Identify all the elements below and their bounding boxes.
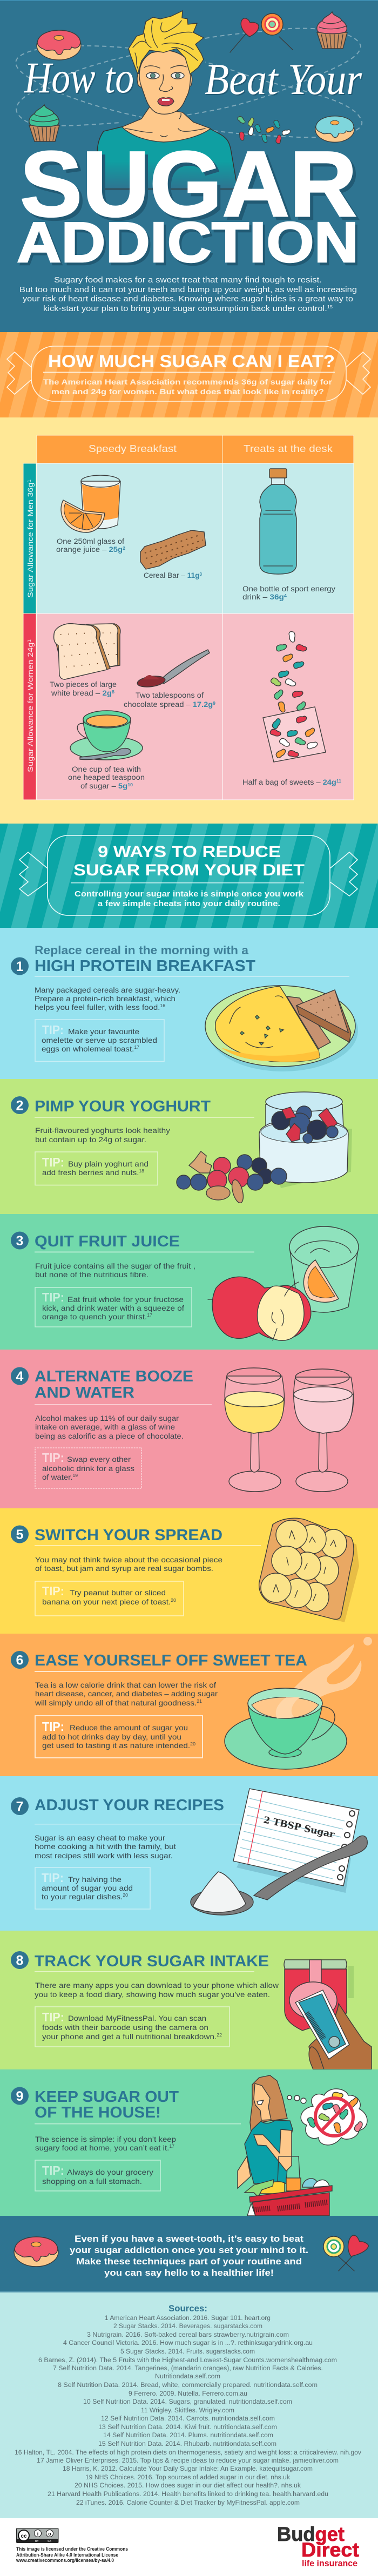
sources list [15, 2315, 361, 2506]
tip box: amount of sugar you add [42, 1884, 133, 1892]
table header: treats at the desk: Treats at the desk [244, 443, 333, 454]
tip box: 22 [217, 2033, 222, 2038]
text: cereal bar: 3 [199, 572, 202, 577]
table header: speedy breakfast [37, 435, 222, 463]
sources list: 14 Self Nutrition Data. 2014. Plums. nutritiondata.self.com [103, 2432, 273, 2439]
sources list: 15 Self Nutrition Data. 2014. Rhubarb. nutritiondata.self.com [98, 2441, 276, 2447]
panel: tip 9 keep sugar out of the house [0, 2069, 378, 2216]
number 5: 5 [16, 1527, 24, 1542]
number 5 [11, 1525, 29, 1543]
text: chocolate spread: chocolate spread – 17.2g [124, 700, 211, 709]
text: tea: One cup of tea with [72, 765, 141, 773]
tip box: Always do your grocery [67, 2168, 153, 2176]
illustration: berry pile [177, 1151, 287, 1204]
illustration: shocked woman [95, 11, 238, 189]
icon: white bread [54, 624, 120, 679]
body text [35, 1681, 218, 1707]
tip box [35, 1716, 202, 1758]
icon: lollipops [323, 2235, 368, 2271]
body text [35, 1414, 184, 1440]
body text: Fruit juice contains all the sugar of the fruit , [35, 1262, 195, 1270]
creative commons badge: cc [21, 2533, 27, 2539]
heading: Replace cereal in the morning with a [35, 943, 249, 957]
body text: Fruit-flavoured yoghurts look healthy [35, 1126, 170, 1135]
sources list: Nutritiondata.self.com [155, 2373, 220, 2380]
tip box: Swap every other [67, 1455, 131, 1464]
number 1: 1 [16, 959, 24, 974]
icon: sports drink bottle [260, 469, 296, 574]
sources list: 16 Halton, TL. 2004. The effects of high protein diets on thermogenesis, satiety and weight loss: a criticalreview. nih.gov [15, 2450, 361, 2456]
text: orange juice: 2 [123, 546, 126, 551]
number 8 [11, 1951, 29, 1969]
sources list: 18 Harris, K. 2012. Calculate Your Daily Sugar Intake: An Example. katequitsugar.com [63, 2466, 313, 2472]
dashed sugar orbit lines [16, 28, 362, 137]
tip box: shopping on a full stomach. [42, 2177, 142, 2186]
tip box: Make your favourite [68, 1027, 139, 1036]
number 7: 7 [16, 1799, 23, 1815]
panel: tip 1 high protein breakfast [0, 928, 378, 1079]
panel: sugar allowance table [0, 417, 378, 824]
panel: how much sugar banner [0, 332, 378, 417]
number 6 [11, 1651, 29, 1669]
tip box: TIP: [42, 1155, 64, 1169]
candy wrapper outline [7, 346, 370, 401]
banner text [43, 377, 333, 396]
heading: EASE YOURSELF OFF SWEET TEA [35, 1652, 307, 1669]
tip box: 20 [190, 1742, 196, 1746]
heading: HOW MUCH SUGAR CAN I EAT? [48, 352, 335, 371]
cell: men treats [222, 463, 354, 613]
icon: pink cupcake [317, 12, 347, 49]
table header: treats at the desk [222, 435, 354, 463]
panel: sources [0, 2292, 378, 2518]
illustration: banana toast [259, 1518, 359, 1622]
illustration: omelette and toast [205, 986, 358, 1071]
number 6: 6 [16, 1653, 23, 1668]
text: chocolate spread: Two tablespoons of [136, 691, 204, 699]
intro text: Sugary food makes for a sweet treat that many find tough to resist. [54, 276, 322, 285]
heading: SWITCH YOUR SPREAD [35, 1527, 222, 1544]
tip box [35, 2160, 160, 2191]
body text: The science is simple: if you don’t keep [35, 2135, 176, 2143]
body text: but contain up to 24g of sugar. [35, 1135, 146, 1144]
heading: PIMP YOUR YOGHURT [35, 1098, 211, 1115]
tip box: 19 [72, 1473, 78, 1478]
sources heading: Sources: [168, 2303, 207, 2314]
licence text: This image is licensed under the Creative Commons [16, 2546, 128, 2552]
tip box: Download MyFitnessPal. You can scan [68, 2014, 206, 2022]
text: cereal bar: Cereal Bar – 11g [144, 571, 199, 579]
banner text: men and 24g for women. But what does that look like in reality? [51, 387, 324, 396]
body text: 21 [197, 1699, 202, 1704]
licence text [16, 2546, 128, 2564]
tip box: banana on your next piece of toast. [42, 1597, 160, 1606]
body text: You may not think twice about the occasional piece [35, 1555, 222, 1564]
tip box: TIP: [42, 2010, 64, 2024]
body text: of toast, but jam and syrup are real sugar bombs. [35, 1564, 213, 1573]
illustration: apple [208, 1277, 311, 1340]
text: orange juice [56, 537, 126, 554]
body text: Prepare a protein-rich breakfast, which [35, 994, 176, 1003]
icon: steam droplet [363, 1637, 372, 1646]
tip box: 20 [171, 1598, 177, 1603]
sources list: 5 Sugar Stacks. 2014. Fruits. sugarstacks.com [120, 2349, 255, 2355]
body text: There are many apps you can download to your phone which allow [35, 1981, 279, 1990]
text: bread: 8 [112, 690, 115, 694]
tip box: Eat fruit whole for your fructose [68, 1295, 184, 1304]
licence text: www.creativecommons.org/licenses/by-sa/4.0 [16, 2558, 114, 2564]
tip box: add fresh berries and nuts. [42, 1168, 132, 1177]
sources list: 20 NHS Choices. 2015. How does sugar in our diet affect our health?. nhs.uk [75, 2483, 301, 2489]
body text: 17 [169, 2144, 175, 2149]
tip box: Buy plain yoghurt and [68, 1159, 148, 1168]
text: orange juice: One 250ml glass of [57, 537, 124, 545]
tip box: 17 [134, 1045, 140, 1050]
icon: heart lollipop [230, 18, 259, 52]
cell: women treats [222, 613, 354, 800]
heading: TRACK YOUR SUGAR INTAKE [35, 1953, 269, 1970]
text: sweets: 11 [336, 779, 342, 784]
sources list: 9 Ferrero. 2009. Nutella. Ferrero.com.au [129, 2391, 247, 2397]
tip box: Try peanut butter or sliced [70, 1588, 166, 1597]
body text: most recipes still work with less sugar. [35, 1851, 173, 1860]
logo: Budget Direct life insurance [277, 2523, 359, 2568]
tip box: 20 [123, 1893, 129, 1898]
number 4: 4 [16, 1369, 24, 1384]
tip box: TIP: [42, 1871, 64, 1885]
body text: Sugar is an easy cheat to make your [35, 1833, 165, 1842]
tip box [35, 1581, 184, 1616]
tip box: your phone and get a full nutritional breakdown. [42, 2032, 201, 2041]
closing text: you can say hello to a healthier life! [104, 2268, 274, 2278]
body text: helps you feel fuller, with less food. [35, 1003, 151, 1011]
panel: closing message [0, 2216, 378, 2292]
panel: tip 6 ease yourself off sweet tea [0, 1634, 378, 1776]
illustration: tea steam [276, 1644, 361, 1720]
intro text [19, 276, 357, 313]
illustration: yoghurt jar with berries [259, 1092, 352, 1188]
sources list: 3 Nutrigrain. 2016. Soft-baked cereal bars strawberry.nutrigrain.com [87, 2332, 289, 2338]
body text: Tea is a low calorie drink that can lower the risk of [35, 1681, 216, 1689]
banner text: a few simple cheats into your daily routine. [98, 899, 280, 908]
illustration: woman with shopping basket [238, 2075, 332, 2216]
tip box: TIP: [42, 1451, 64, 1465]
tip box: get used to tasting it as nature intended. [42, 1741, 177, 1750]
text: tea [68, 765, 145, 790]
tip box: Reduce the amount of sugar you [70, 1723, 188, 1732]
tip box: 18 [139, 1169, 145, 1174]
illustration: glass of white wine [225, 1368, 285, 1492]
banner text [75, 889, 304, 908]
closing text: your sugar addiction once you set your mind to it. [70, 2245, 308, 2255]
tip box: eggs on wholemeal toast. [42, 1044, 127, 1053]
sources list: 6 Barnes, Z. (2014). The 5 Fruits with the Highest-and Lowest-Sugar Counts.womenshealthmag.com [38, 2357, 337, 2364]
body text [35, 1833, 176, 1860]
title: How to Beat Your: How to [24, 53, 134, 102]
table header: speedy breakfast: Speedy Breakfast [89, 443, 177, 454]
tip box: orange to quench your thirst. [42, 1312, 138, 1321]
sources list: 12 Self Nutrition Data. 2014. Carrots. nutritiondata.self.com [101, 2416, 275, 2422]
heading: SUGAR FROM YOUR DIET [73, 861, 305, 879]
illustration: spoon of sugar [191, 1836, 367, 1915]
title: SUGAR: SUGAR [20, 132, 357, 236]
icon: chocolate spoon [137, 650, 210, 689]
heading: ALTERNATE BOOZE [35, 1368, 193, 1385]
row label: men: Sugar Allowance for Men 36g [26, 503, 35, 598]
number 9 [11, 2087, 29, 2105]
tip box: foods with their barcode using the camera on [42, 2023, 208, 2032]
icon: bag of sweets [263, 631, 326, 762]
body text [35, 1981, 279, 1999]
illustration: glass of rose wine [294, 1369, 354, 1492]
icon: donut [14, 2237, 58, 2267]
text: sports drink: drink – 36g [242, 593, 282, 601]
tip box: TIP: [42, 1290, 64, 1304]
icon: spiral lollipop [261, 14, 293, 50]
intro text: kick-start your plan to bring your sugar consumption back under control. [43, 305, 292, 313]
logo: Budget Direct life insurance: Budget [277, 2523, 345, 2545]
tip box: TIP: [42, 1719, 64, 1734]
number 1 [11, 957, 29, 975]
tip box: TIP: [42, 1584, 64, 1598]
illustration: glass of water with orange [289, 1226, 359, 1312]
icon: green cupcake [29, 105, 59, 141]
number 8: 8 [16, 1953, 24, 1968]
icon: jelly beans [237, 116, 291, 144]
creative commons badge: BY [35, 2540, 39, 2543]
sources list: 21 Harvard Health Publications. 2014. Health benefits linked to drinking tea. health.harvard.edu [48, 2491, 328, 2498]
body text: Alcohol makes up 11% of our daily sugar [35, 1414, 179, 1422]
panel: footer [0, 2518, 378, 2576]
tip box: Try halving the [68, 1875, 122, 1884]
tip box [35, 1448, 141, 1488]
panel: tip 7 adjust your recipes [0, 1776, 378, 1931]
licence text: Attribution-Share Alike 4.0 International License [16, 2552, 118, 2558]
sources list: 19 NHS Choices. 2016. Top sources of added sugar in our diet. nhs.uk [85, 2474, 290, 2481]
icon: blue donut [315, 116, 354, 142]
row label: men [23, 463, 36, 613]
tip box [35, 1020, 164, 1062]
body text: you to keep a food diary, showing how much sugar you’ve eaten. [35, 1990, 270, 1999]
heading [35, 2088, 179, 2121]
row label: women [23, 613, 36, 800]
heading [73, 843, 305, 879]
panel: tip 5 switch your spread [0, 1508, 378, 1634]
text: sports drink: 4 [284, 594, 287, 598]
tip box: add to hot drinks day by day, until you [42, 1732, 181, 1741]
banner text: Controlling your sugar intake is simple once you work [75, 889, 304, 899]
text: tea: one heaped teaspoon [68, 773, 145, 781]
panel: tip 2 pimp your yoghurt [0, 1079, 378, 1214]
icon: cup of tea [70, 711, 143, 760]
closing text: Even if you have a sweet-tooth, it’s easy to beat [75, 2234, 303, 2244]
creative commons badge: i [37, 2531, 38, 2537]
text: orange juice: orange juice – 25g [56, 545, 122, 554]
body text: Many packaged cereals are sugar-heavy. [35, 986, 180, 994]
illustration: recipe note [233, 1789, 359, 1893]
intro text: 15 [327, 305, 333, 309]
sources list: 22 iTunes. 2016. Calorie Counter & Diet Tracker by MyFitnessPal. apple.com [76, 2500, 300, 2506]
illustration: cup of tea on saucer [225, 1688, 347, 1769]
tip box: to your regular dishes. [42, 1892, 117, 1901]
tip box [35, 1867, 150, 1909]
banner text: The American Heart Association recommends 36g of sugar daily for [43, 377, 333, 386]
sources list: 10 Self Nutrition Data. 2014. Sugars, granulated. nutritiondata.self.com [83, 2399, 292, 2405]
text: chocolate spread: 9 [213, 701, 216, 706]
body text: sugary food at home, you can’t eat it. [35, 2143, 159, 2152]
candy wrapper outline [19, 835, 357, 915]
tip box: kick, and drink water with a squeeze of [42, 1304, 184, 1312]
closing text [70, 2234, 308, 2278]
heading [35, 1368, 193, 1401]
panel: tip 4 alternate booze and water [0, 1350, 378, 1508]
number 7 [11, 1797, 29, 1815]
text: tea: of sugar – 5g [80, 782, 127, 790]
body text [35, 986, 180, 1011]
sources list: 4 Cancer Council Victoria. 2016. How much sugar is in ...?. rethinksugarydrink.org.au [63, 2340, 313, 2346]
illustration: recipe note: 2 TBSP Sugar [262, 1815, 336, 1840]
title: ADDICTION: ADDICTION [17, 211, 359, 274]
body text [35, 1262, 195, 1279]
tip box [35, 2007, 230, 2047]
thought bubble: no sweets [287, 2089, 367, 2145]
panel: 9 ways banner [0, 824, 378, 928]
body text: being as calorific as a piece of chocolate. [35, 1432, 184, 1440]
body text [35, 2135, 176, 2152]
tip box: alcoholic drink for a glass [42, 1464, 134, 1473]
tip box: omelette or serve up scrambled [42, 1036, 157, 1044]
row label: women: Sugar Allowance for Women 24g [26, 666, 35, 772]
row label: men: 1 [27, 479, 32, 482]
icon: cereal bar [140, 530, 206, 569]
logo: Budget Direct life insurance: Direct [301, 2539, 359, 2561]
body text [35, 1126, 170, 1144]
panel: header [0, 0, 378, 332]
text: bread: white bread – 2g [51, 689, 111, 697]
panel: tip 8 track your sugar intake [0, 1931, 378, 2069]
sources list: 8 Self Nutrition Data. 2014. Bread, white, commercially prepared. nutritiondata.self.com [58, 2382, 318, 2389]
sources list: 11 Wrigley. Skittles. Wrigley.com [141, 2408, 234, 2414]
number 4 [11, 1367, 29, 1385]
body text: heart disease, cancer, and diabetes – adding sugar [35, 1689, 218, 1698]
heading: HIGH PROTEIN BREAKFAST [35, 957, 255, 975]
tip box: TIP: [42, 1023, 64, 1037]
tip box: TIP: [42, 2163, 64, 2177]
cell: women breakfast [37, 613, 222, 800]
text: sports drink: One bottle of sport energy [242, 585, 335, 593]
heading: 9 WAYS TO REDUCE [98, 843, 281, 861]
sources list: 7 Self Nutrition Data. 2014. Tangerines, (mandarin oranges), raw Nutrition Facts & Calories. [53, 2365, 323, 2372]
tip box: 17 [147, 1313, 153, 1318]
creative commons badge [16, 2528, 58, 2543]
text: sweets: Half a bag of sweets – 24g [242, 778, 335, 786]
creative commons badge: o [48, 2531, 51, 2537]
row label: women: 1 [27, 639, 32, 642]
text: sports drink [242, 585, 335, 601]
intro text: your risk of heart disease and diabetes. Knowing where sugar hides is a great way to [23, 295, 353, 304]
sources list: 13 Self Nutrition Data. 2014. Kiwi fruit. nutritiondata.self.com [98, 2424, 277, 2431]
text: bread [50, 680, 117, 697]
body text: 16 [160, 1003, 166, 1008]
number 9: 9 [16, 2089, 23, 2104]
heading: OF THE HOUSE! [35, 2104, 161, 2121]
heading: KEEP SUGAR OUT [35, 2088, 179, 2106]
body text: but none of the nutritious fibre. [35, 1270, 148, 1279]
panel: tip 3 quit fruit juice [0, 1214, 378, 1350]
tip box [35, 1152, 158, 1185]
heading: AND WATER [35, 1384, 134, 1401]
text: tea: 10 [127, 783, 133, 787]
number 2 [11, 1096, 29, 1114]
number 3 [11, 1231, 29, 1250]
title: How to Beat Your: Beat Your [205, 55, 362, 104]
heading: ADJUST YOUR RECIPES [35, 1797, 224, 1814]
closing text: Make these techniques part of your routine and [76, 2256, 302, 2267]
body text: intake on average, with a glass of wine [35, 1422, 175, 1431]
icon: orange juice and slice [61, 475, 120, 532]
body text: will simply undo all of that natural goodness. [35, 1698, 183, 1707]
body text [35, 1555, 222, 1573]
number 2: 2 [16, 1098, 23, 1114]
text: chocolate spread [124, 691, 216, 709]
logo: Budget Direct life insurance: life insurance [302, 2558, 357, 2568]
intro text: But too much and it can rot your teeth and bump up your weight, as well as increasing [19, 286, 357, 294]
text: bread: Two pieces of large [50, 680, 117, 689]
icon: pink donut [37, 30, 81, 60]
cell: men breakfast [37, 463, 222, 613]
sources list: 2 Sugar Stacks. 2014. Beverages. sugarstacks.com [113, 2323, 262, 2330]
heading: QUIT FRUIT JUICE [35, 1233, 180, 1250]
sources list: 1 American Heart Association. 2016. Sugar 101. heart.org [105, 2315, 271, 2322]
heading [35, 943, 255, 975]
body text: home cooking a hit with the family, but [35, 1842, 176, 1851]
sources list: 17 Jamie Oliver Enterprises. 2015. Top tips & recipe ideas to reduce your sugar intake. jamieoliver.com [37, 2458, 339, 2464]
illustration: jam jar and phone [284, 1960, 372, 2069]
title: How to Beat Your [24, 53, 362, 104]
number 3: 3 [16, 1233, 23, 1249]
creative commons badge: SA [48, 2540, 51, 2543]
tip box: of water. [42, 1473, 71, 1481]
tip box [35, 1287, 192, 1327]
